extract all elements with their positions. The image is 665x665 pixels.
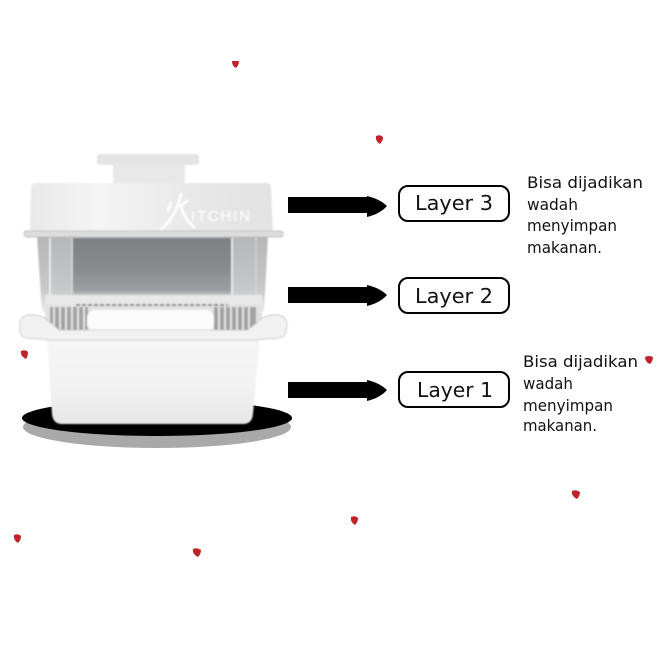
label: Layer 2 <box>399 278 509 313</box>
logo: ITCHIN <box>191 208 250 225</box>
description: layer 3 <box>527 173 643 257</box>
description: layer 1: makanan. <box>523 416 597 435</box>
description: layer 3: makanan. <box>527 238 602 257</box>
label: Layer 3: Layer 3 <box>415 191 493 215</box>
description: layer 1: wadah <box>523 374 573 393</box>
label: Layer 2: Layer 2 <box>415 284 493 308</box>
label: Layer 1 <box>399 372 509 407</box>
label: Layer 1: Layer 1 <box>417 378 493 402</box>
product: stacked food container <box>20 154 292 448</box>
lid handle <box>97 154 199 184</box>
description: layer 3: menyimpan <box>527 216 617 235</box>
arrow: layer 1 <box>288 380 387 401</box>
red speckles <box>14 61 653 557</box>
description: layer 3: Bisa dijadikan <box>527 173 643 192</box>
description: layer 1: Bisa dijadikan <box>523 352 638 371</box>
ground shadow <box>22 400 292 448</box>
description: layer 3: wadah <box>527 195 578 214</box>
description: layer 1 <box>523 352 638 435</box>
lid <box>24 183 283 237</box>
label: Layer 3 <box>399 186 509 221</box>
logo <box>161 194 250 229</box>
layer 2: tray <box>45 305 262 333</box>
arrow: layer 3 <box>288 196 387 217</box>
arrow: layer 2 <box>288 285 387 306</box>
container body <box>20 154 287 424</box>
layer 3: clear body <box>37 236 268 312</box>
description: layer 1: menyimpan <box>523 396 613 415</box>
layer 1: base <box>20 315 287 424</box>
